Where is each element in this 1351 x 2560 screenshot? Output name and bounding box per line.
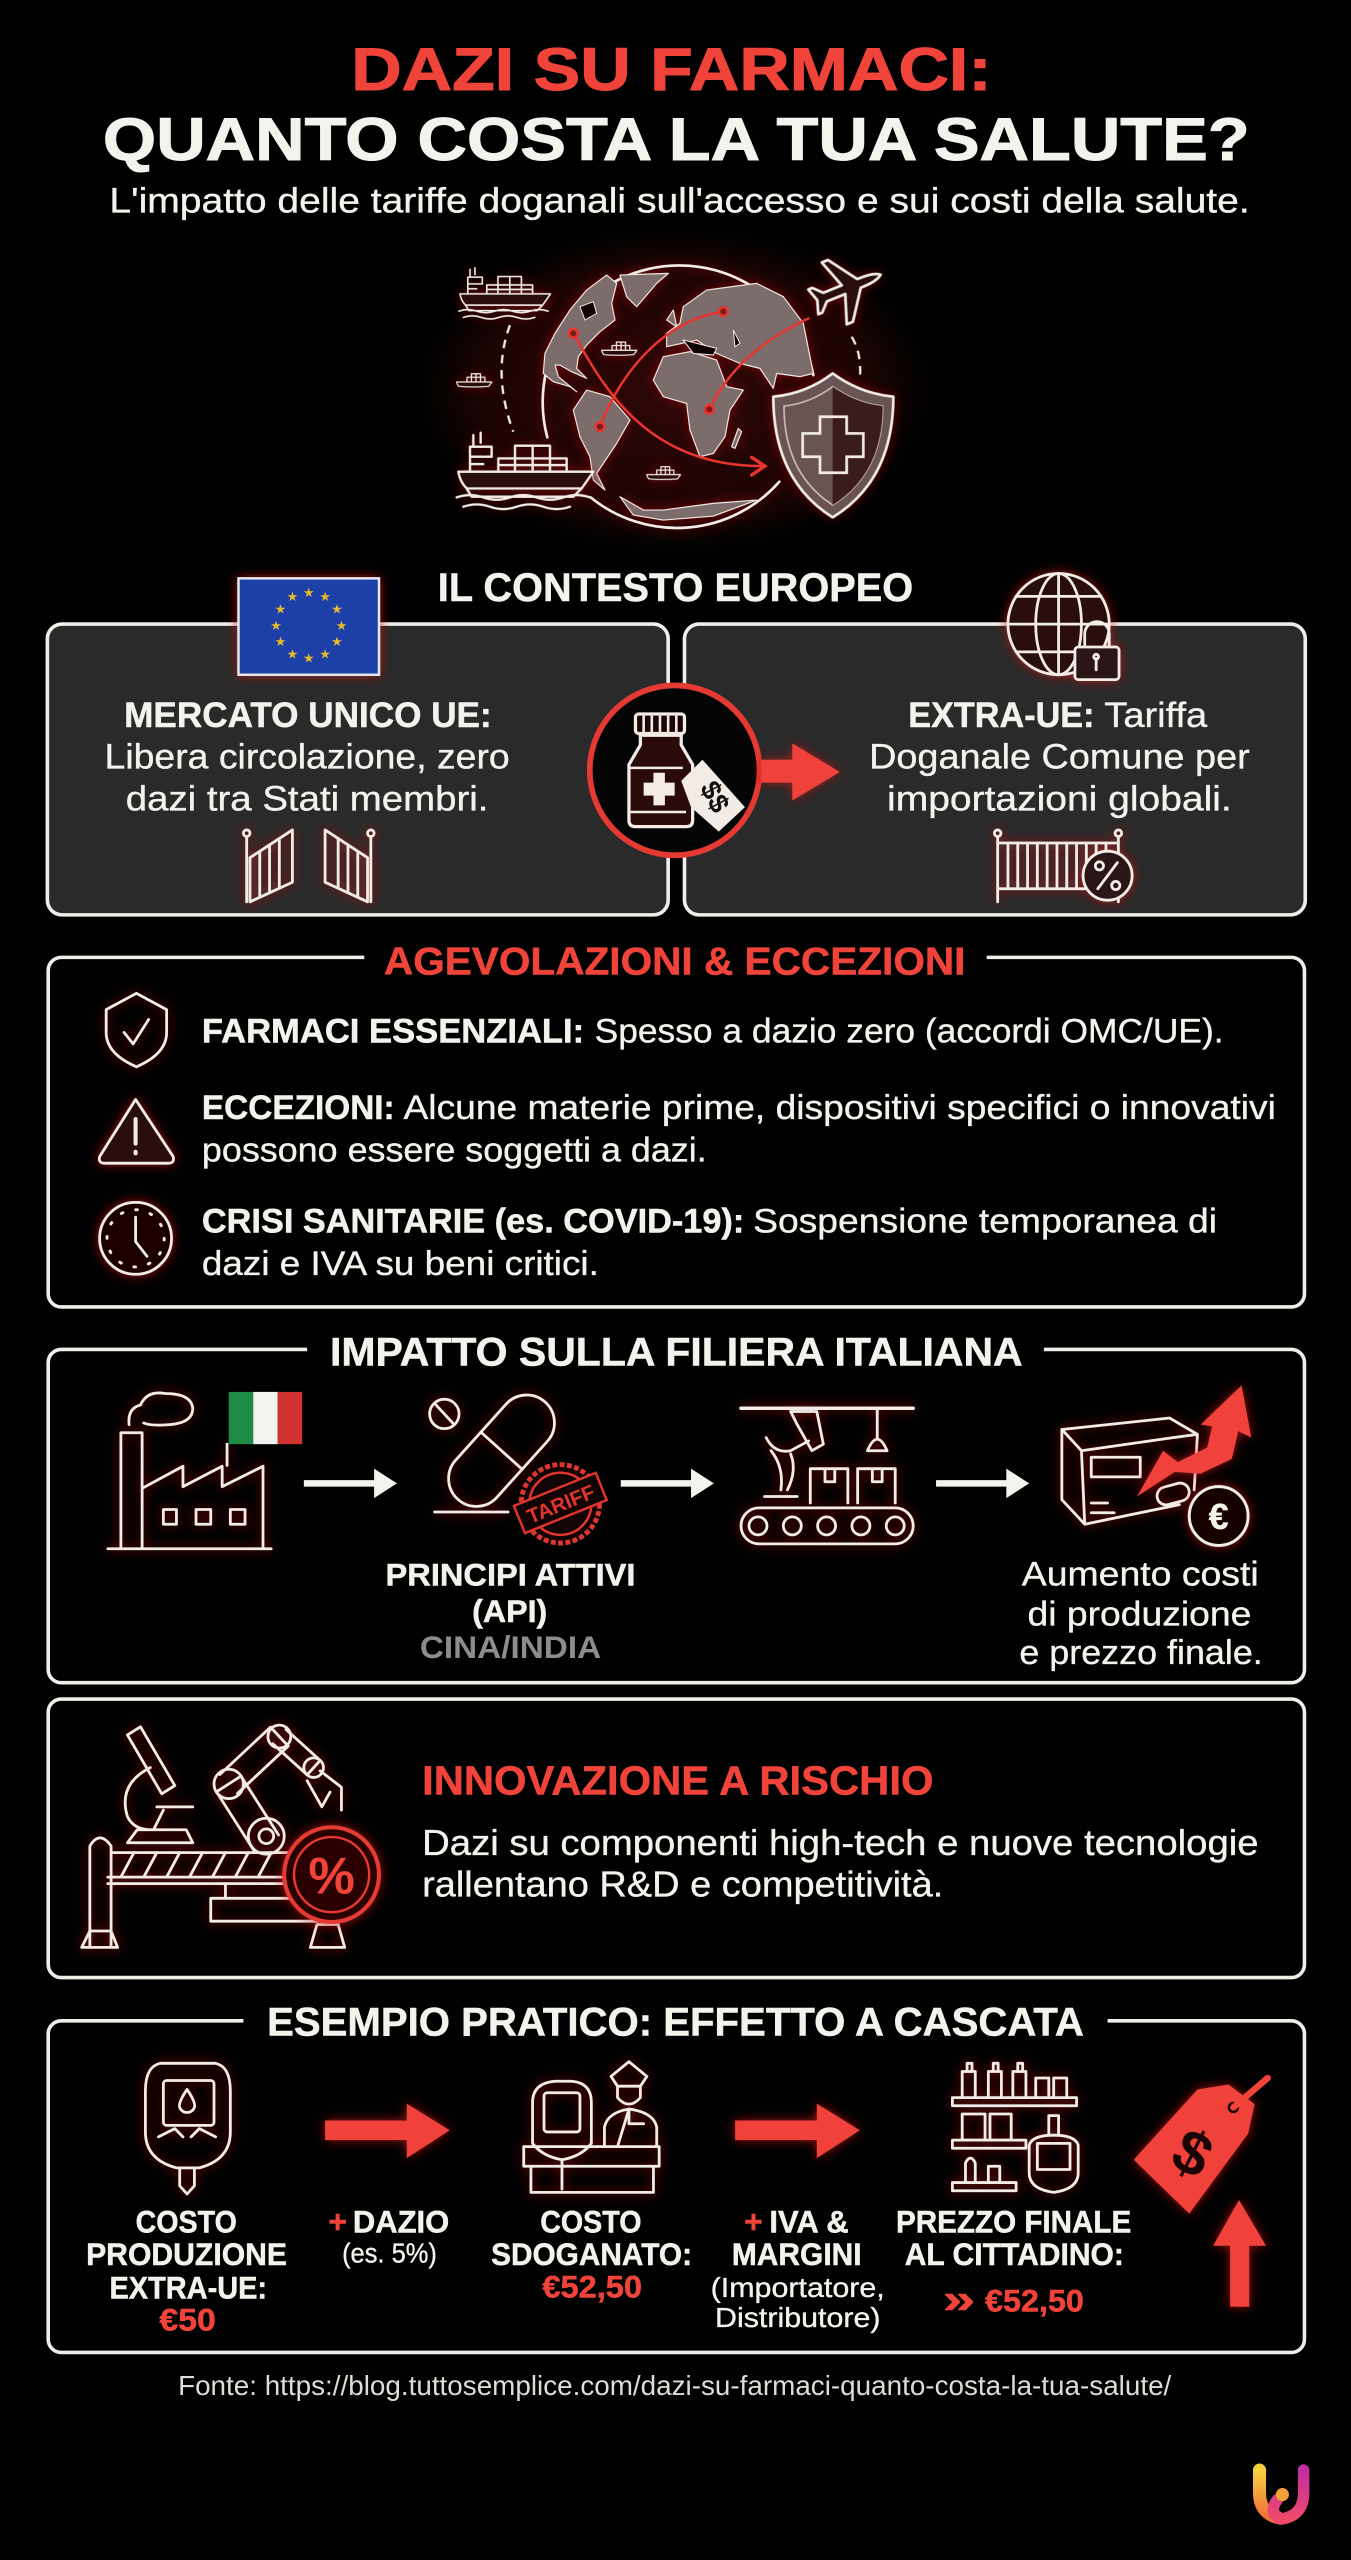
item: farmaci essenziali: FARMACI ESSENZIALI: [202, 1012, 584, 1050]
panel text: Libera circolazione, zero [105, 738, 510, 777]
icon: pharmacy shelves with meter [952, 2063, 1078, 2192]
panel text: Doganale Comune per [869, 738, 1250, 777]
plane [801, 244, 893, 333]
step: iva e margini [711, 2203, 885, 2333]
icon: red price tag [1134, 2078, 1268, 2214]
step: prezzo finale: PREZZO FINALE [896, 2203, 1131, 2239]
panel text: MERCATO UNICO UE: [124, 696, 492, 735]
icon: globe with padlock [1008, 573, 1119, 680]
EU flag: ★ [287, 589, 298, 604]
EU flag: ★ [275, 634, 286, 649]
arrow: step 2 [621, 1469, 714, 1498]
label: aumento costi: e prezzo finale. [1019, 1634, 1263, 1672]
panel: impatto sulla filiera italiana [48, 1331, 1304, 1683]
title line 1: DAZI SU FARMACI: [351, 35, 992, 103]
panel: agevolazioni e eccezioni [48, 941, 1304, 1307]
step: prezzo finale: AL CITTADINO: [905, 2236, 1124, 2272]
panel text [869, 696, 1250, 818]
icon: warning triangle [99, 1099, 173, 1163]
EU flag: ★ [303, 585, 315, 600]
euro coin: € [1209, 1496, 1229, 1537]
step: iva e margini: Distributore) [715, 2302, 881, 2333]
icon: price tag: $$ [694, 776, 736, 818]
item: crisi sanitarie: Sospensione temporanea di [753, 1203, 1217, 1241]
icon: medicine bottle [629, 714, 693, 827]
item: farmaci essenziali: Spesso a dazio zero (accordi OMC/UE). [595, 1012, 1224, 1050]
shield [773, 373, 893, 517]
EU flag: ★ [336, 618, 347, 633]
step: costo sdoganato: COSTO [540, 2203, 642, 2239]
icon: capsule and tariff stamp [430, 1384, 607, 1543]
tariff stamp [514, 1465, 607, 1543]
EU flag: ★ [331, 601, 343, 616]
title [103, 35, 1250, 173]
step: iva e margini: + [744, 2203, 763, 2239]
EU flag: ★ [303, 650, 315, 665]
italian flag [229, 1392, 302, 1444]
panel: innovazione a rischio [48, 1699, 1304, 1978]
icon: price tag [681, 760, 745, 832]
icon: customs officer with meter [524, 2062, 659, 2192]
panel text: dazi tra Stati membri. [126, 779, 488, 818]
EU flag: ★ [270, 618, 282, 633]
icon: italian factory [108, 1392, 302, 1549]
icon: production line [741, 1408, 913, 1544]
title line 2: QUANTO COSTA LA TUA SALUTE? [103, 105, 1250, 173]
percent badge [284, 1827, 379, 1922]
step: costo produzione [86, 2203, 287, 2337]
percent badge: % [308, 1847, 355, 1905]
logo [1260, 2470, 1304, 2519]
icon: red price tag: $ [1161, 2115, 1223, 2192]
heading: IMPATTO SULLA FILIERA ITALIANA [330, 1331, 1023, 1375]
step: dazio [328, 2203, 449, 2269]
label: principi attivi: PRINCIPI ATTIVI [386, 1556, 635, 1592]
panel text: Tariffa [1104, 696, 1208, 735]
source line: Fonte: https://blog.tuttosemplice.com/dazi-su-farmaci-quanto-costa-la-tua-salute/ [178, 2370, 1172, 2401]
item: eccezioni [202, 1089, 1276, 1170]
tariff stamp: TARIFF [524, 1481, 598, 1529]
step: costo produzione: COSTO [136, 2203, 237, 2239]
heading: ESEMPIO PRATICO: EFFETTO A CASCATA [267, 2001, 1084, 2045]
panel: esempio pratico [48, 2001, 1304, 2352]
icon: shield check [106, 993, 167, 1067]
euro coin [1189, 1487, 1248, 1545]
EU flag: ★ [287, 646, 298, 661]
icon: open gates [243, 830, 374, 902]
item: farmaci essenziali [202, 1012, 1224, 1050]
panel: mercato unico UE [47, 578, 668, 915]
arrow: price rising [1213, 2200, 1266, 2307]
ships [457, 268, 680, 509]
step: dazio: + [328, 2203, 347, 2239]
body text: Dazi su componenti high-tech e nuove tecnologie [422, 1822, 1259, 1863]
label: aumento costi [1019, 1555, 1263, 1672]
step: prezzo finale: » [943, 2276, 975, 2322]
central medicine and price tag badge [590, 685, 760, 855]
label: principi attivi: CINA/INDIA [420, 1629, 601, 1665]
icon: microscope, robot arm and barrier [82, 1725, 379, 1947]
dashed routes [502, 325, 860, 432]
step: prezzo finale [896, 2203, 1131, 2322]
step: costo sdoganato: SDOGANATO: [491, 2236, 692, 2272]
panel text: EXTRA-UE: [908, 696, 1095, 735]
step: costo sdoganato [491, 2203, 692, 2305]
step: costo produzione: €50 [159, 2301, 216, 2337]
EU flag: ★ [275, 601, 286, 616]
panel text: importazioni globali. [887, 779, 1232, 818]
trade routes [569, 307, 808, 475]
arrow: step 3 [936, 1469, 1029, 1498]
step: dazio: (es. 5%) [342, 2238, 437, 2269]
step: dazio: DAZIO [353, 2203, 449, 2239]
icon: box, rising arrow and euro coin [1062, 1385, 1251, 1545]
label: aumento costi: Aumento costi [1022, 1555, 1259, 1593]
label: principi attivi [386, 1556, 635, 1665]
panel text [105, 696, 510, 818]
heading: AGEVOLAZIONI & ECCEZIONI [384, 941, 965, 984]
globe [543, 265, 813, 528]
label: aumento costi: di produzione [1028, 1596, 1251, 1634]
arrow: first cascade step [325, 2104, 450, 2158]
step: costo produzione: PRODUZIONE [86, 2236, 287, 2272]
EU flag: ★ [331, 634, 343, 649]
EU flag [239, 578, 379, 675]
arrow: step 1 [304, 1469, 397, 1498]
body text [422, 1822, 1259, 1905]
panel: extra-UE [684, 573, 1305, 915]
item: crisi sanitarie: CRISI SANITARIE (es. COVID-19): [202, 1203, 744, 1241]
step: costo sdoganato: €52,50 [542, 2269, 642, 2305]
hero illustration: globe, ships, plane and shield [422, 230, 928, 550]
item: eccezioni: Alcune materie prime, dispositivi specifici o innovativi [404, 1089, 1276, 1127]
EU flag: ★ [319, 646, 331, 661]
arrow: red to extra-UE [761, 743, 840, 801]
arrow: second cascade step [735, 2104, 860, 2158]
item: eccezioni: possono essere soggetti a dazi. [202, 1132, 707, 1170]
rising arrow [1137, 1385, 1251, 1496]
step: iva e margini: MARGINI [732, 2236, 862, 2272]
subtitle: L'impatto delle tariffe doganali sull'accesso e sui costi della salute. [109, 181, 1250, 220]
step: costo produzione: EXTRA-UE: [109, 2270, 267, 2306]
item: crisi sanitarie [202, 1203, 1217, 1283]
step: iva e margini: (Importatore, [711, 2272, 885, 2303]
icon: clock [100, 1202, 172, 1274]
item: eccezioni: ECCEZIONI: [202, 1089, 395, 1127]
heading: il contesto europeo: IL CONTESTO EUROPEO [438, 566, 913, 610]
icon: closed gate with percent [994, 830, 1132, 902]
item: crisi sanitarie: dazi e IVA su beni critici. [202, 1245, 599, 1283]
heading: INNOVAZIONE A RISCHIO [422, 1758, 933, 1804]
body text: rallentano R&D e competitività. [422, 1864, 943, 1905]
step: prezzo finale: €52,50 [985, 2283, 1084, 2319]
EU flag: ★ [319, 589, 331, 604]
icon: glucose meter [145, 2063, 230, 2194]
label: principi attivi: (API) [472, 1593, 547, 1629]
step: iva e margini: IVA & [769, 2203, 849, 2239]
